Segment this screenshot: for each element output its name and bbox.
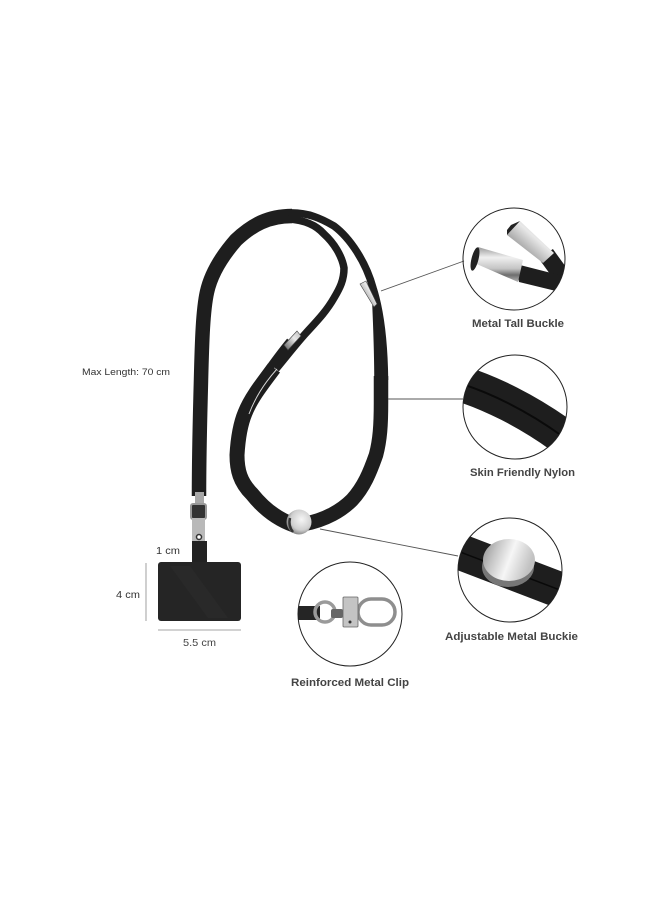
detail circle: adjustable metal buckle (455, 518, 565, 622)
detail label: adjustable metal buckle: Adjustable Metal Buckie (445, 631, 578, 643)
detail circle: skin friendly nylon (462, 355, 567, 459)
detail label: metal tall buckle: Metal Tall Buckle (472, 318, 564, 330)
infographic canvas (82, 208, 578, 688)
dimension labels: 5.5 cm (183, 637, 216, 649)
metal tall buckle on cord (284, 281, 377, 350)
cord strand gap (249, 369, 277, 414)
max length label: Max Length: 70 cm (82, 367, 170, 378)
detail label: reinforced metal clip: Reinforced Metal Clip (291, 677, 409, 689)
dimension labels: 4 cm (116, 589, 140, 601)
detail label: skin friendly nylon: Skin Friendly Nylon (470, 467, 575, 479)
adjustable metal bead on cord (286, 510, 312, 534)
lanyard cord (199, 213, 384, 525)
detail circle: metal tall buckle (463, 208, 572, 310)
dimension labels: 1 cm (156, 545, 180, 557)
dimension labels (116, 545, 241, 649)
detail circle: reinforced metal clip (296, 562, 402, 666)
phone tether card with clip (158, 492, 241, 621)
leader lines (320, 261, 464, 556)
